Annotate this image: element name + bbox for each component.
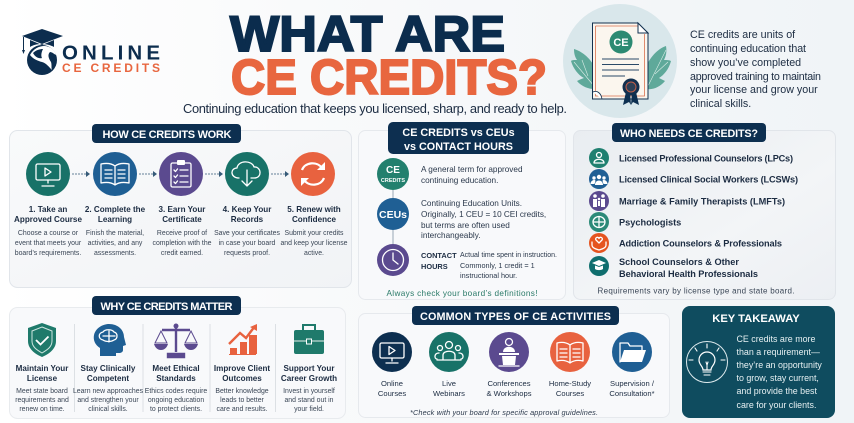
activity: online courses: Courses <box>378 389 406 398</box>
item: contact hours: HOURS <box>421 262 448 271</box>
logo: Online CE Credits: CE CREDITS <box>62 61 160 75</box>
takeaway text: to grow, stay current, <box>736 373 819 383</box>
item: CE credits: continuing education. <box>421 176 498 185</box>
heading: how CE credits work <box>92 124 241 143</box>
item: CE credits <box>377 158 523 190</box>
reason: ethical standards <box>145 324 207 413</box>
item: contact hours: instructional hour. <box>460 271 517 280</box>
step 4 <box>214 152 280 257</box>
panel: how CE credits work <box>10 124 352 288</box>
step 5: Submit your credits <box>285 230 344 237</box>
item: CEUs: interchangeably. <box>421 231 480 240</box>
arrow <box>205 171 223 177</box>
panel: key takeaway <box>682 306 835 418</box>
item: CE credits: CREDITS <box>381 178 405 184</box>
reason: career growth: your field. <box>294 406 324 413</box>
step 3 <box>153 152 212 257</box>
list item: LCSWs <box>589 169 798 189</box>
intro text: your license and grow your <box>690 84 818 96</box>
step 1: event that meets your <box>15 240 82 247</box>
step 4: requests proof. <box>224 250 270 257</box>
step 5: active. <box>304 250 324 257</box>
reason: maintain license: Meet state board <box>16 388 68 395</box>
item: CEUs <box>377 198 546 240</box>
item: contact hours: CONTACT <box>421 251 457 260</box>
activity: online courses: Online <box>381 379 403 388</box>
activity: live webinars: Webinars <box>433 389 465 398</box>
intro text: CE credits are units of <box>690 29 795 41</box>
step 1: Approved Course <box>14 215 82 224</box>
reason: career growth: Career Growth <box>281 374 337 383</box>
reason: stay competent: clinical skills. <box>88 406 128 413</box>
reason: career growth: Invest in yourself <box>283 388 335 395</box>
intro text: show you’ve completed <box>690 57 801 69</box>
step 4: Records <box>231 215 264 224</box>
step 5: Confidence <box>292 215 337 224</box>
list item: school counselors: School Counselors & Other <box>619 257 739 267</box>
icon: light bulb <box>686 342 728 382</box>
reason: career growth: and stand out in <box>284 397 334 404</box>
intro text <box>690 29 821 110</box>
reason: stay competent: Learn new approaches <box>73 388 144 395</box>
heading: why CE credits matter: WHY CE CREDITS MATTER <box>100 301 233 313</box>
reason: client outcomes: Better knowledge <box>215 388 269 395</box>
step 5: 5. Renew with <box>287 205 341 214</box>
reason: client outcomes: care and results. <box>217 406 268 413</box>
arrow <box>72 171 90 177</box>
reason: stay competent: Competent <box>87 374 129 383</box>
activity: live webinars <box>429 332 469 398</box>
step 2 <box>85 152 146 257</box>
list item: school counselors <box>589 256 758 279</box>
step 3: 3. Earn Your <box>159 205 206 214</box>
step 3: Certificate <box>162 215 202 224</box>
intro text: clinical skills. <box>690 98 751 110</box>
reason: career growth <box>281 325 337 413</box>
subtitle: Continuing education that keeps you licensed, sharp, and ready to help. <box>183 101 567 116</box>
heading: comparison <box>388 122 529 154</box>
reason: stay competent: and strengthen your <box>77 397 139 404</box>
title: CE CREDITS? <box>231 51 547 105</box>
reason: ethical standards: ongoing education <box>148 397 204 404</box>
reason: ethical standards: Ethics codes require <box>145 388 207 395</box>
reason: client outcomes: Improve Client <box>214 364 270 373</box>
step 1 <box>14 152 82 257</box>
intro text: approved training to maintain <box>690 71 821 83</box>
step 1: Choose a course or <box>18 230 79 237</box>
takeaway text <box>736 334 822 410</box>
item: CEUs: Continuing Education Units. <box>421 199 522 208</box>
item: CE credits: CE <box>386 165 400 176</box>
activity: supervision and consultation: Supervision / <box>610 379 655 388</box>
heading: common types <box>412 306 619 325</box>
reason: maintain license <box>15 323 69 413</box>
note: approval guidelines: *Check with your board for specific approval guidelines. <box>410 408 598 417</box>
step 2: Finish the material, <box>86 230 144 237</box>
heading: key takeaway: KEY TAKEAWAY <box>712 313 800 325</box>
step 2: activities, and any <box>88 240 143 247</box>
step 3: credit earned. <box>161 250 203 257</box>
activity: supervision and consultation <box>609 332 655 398</box>
step 3: completion with the <box>153 240 212 247</box>
activity: online courses <box>372 332 412 398</box>
list item: psychologists: Psychologists <box>619 218 681 228</box>
step 2: 2. Complete the <box>85 205 146 214</box>
panel: who needs CE credits <box>574 123 836 300</box>
list item: LMFTs: Marriage & Family Therapists (LMFTs) <box>619 196 785 206</box>
item: contact hours: Commonly, 1 credit = 1 <box>460 261 535 270</box>
note: requirements vary: Requirements vary by license type and state board. <box>598 286 794 296</box>
reason: maintain license: renew on time. <box>19 406 65 413</box>
item: CEUs: CEUs <box>379 209 407 221</box>
activity: conferences and workshops: & Workshops <box>486 389 532 398</box>
step 4: in case your board <box>219 240 276 247</box>
logo: Online CE Credits <box>22 29 160 75</box>
activity: supervision and consultation: Consultation* <box>609 389 655 398</box>
list item: LCSWs: Licensed Clinical Social Workers (LCSWs) <box>619 174 798 184</box>
list item: addiction counselors <box>589 233 782 253</box>
item: CEUs: Originally, 1 CEU = 10 CEI credits, <box>421 210 546 219</box>
step 1: board’s requirements. <box>15 250 81 257</box>
reason: maintain license: License <box>27 374 58 383</box>
list item: LPCs: Licensed Professional Counselors (LPCs) <box>619 154 793 164</box>
heading: comparison: vs CONTACT HOURS <box>404 141 513 153</box>
takeaway text: care for your clients. <box>736 400 816 410</box>
activity: home-study courses: Courses <box>556 389 584 398</box>
heading: why CE credits matter <box>92 296 241 315</box>
activity: home-study courses: Home-Study <box>549 379 591 388</box>
activity: home-study courses <box>549 332 591 398</box>
item: contact hours: Actual time spent in instruction. <box>460 252 557 259</box>
takeaway text: and provide the best <box>736 386 817 396</box>
step 5 <box>280 152 348 257</box>
list item: psychologists <box>589 212 681 232</box>
step 4: 4. Keep Your <box>223 205 272 214</box>
reason: ethical standards: Standards <box>156 374 196 383</box>
item: CE credits: A general term for approved <box>421 165 523 174</box>
list item: LPCs <box>589 148 793 168</box>
activity: conferences and workshops <box>486 332 532 398</box>
title <box>230 6 547 105</box>
list item: school counselors: Behavioral Health Professionals <box>619 269 758 279</box>
reason: client outcomes: leads to better <box>220 397 265 404</box>
item: CEUs: but terms are often used <box>421 221 510 230</box>
reason: client outcomes: Outcomes <box>222 374 262 383</box>
heading: comparison: CE CREDITS vs CEUs <box>402 127 515 139</box>
title: WHAT ARE <box>230 6 505 62</box>
reason: client outcomes <box>214 324 270 413</box>
heading: how CE credits work: HOW CE CREDITS WORK <box>102 129 232 141</box>
arrow <box>271 171 289 177</box>
note: check definitions: Always check your board’s definitions! <box>386 289 538 298</box>
takeaway text: than a requirement— <box>736 347 820 357</box>
takeaway text: they’re an opportunity <box>736 360 822 370</box>
activity: live webinars: Live <box>442 379 456 388</box>
step 4: Save your certificates <box>214 230 280 237</box>
reason: ethical standards: Meet Ethical <box>152 364 200 373</box>
panel: common types of CE activities <box>358 306 670 418</box>
panel: CE credits vs CEUs vs contact hours <box>358 122 566 300</box>
heading: who needs CE credits <box>612 123 766 142</box>
heading: common types: COMMON TYPES OF CE ACTIVITIES <box>420 311 611 323</box>
step 2: assessments. <box>94 250 136 257</box>
list item: LMFTs <box>589 191 785 211</box>
activity: conferences and workshops: Conferences <box>487 379 531 388</box>
reason: maintain license: requirements and <box>15 397 69 404</box>
step 2: Learning <box>98 215 132 224</box>
item: contact hours <box>377 244 557 280</box>
arrow <box>139 171 157 177</box>
intro text: continuing education that <box>690 43 806 55</box>
list item: addiction counselors: Addiction Counselors & Professionals <box>619 238 782 248</box>
step 5: and keep your license <box>280 240 348 247</box>
panel: why CE credits matter <box>10 296 346 418</box>
reason: stay competent: Stay Clinically <box>81 364 136 373</box>
step 3: Receive proof of <box>157 230 207 237</box>
reason: stay competent <box>73 324 144 413</box>
heading: who needs CE credits: WHO NEEDS CE CREDITS? <box>620 128 758 140</box>
reason: career growth: Support Your <box>284 364 335 373</box>
logo: Online CE Credits: ONLINE <box>62 42 160 64</box>
step 1: 1. Take an <box>29 205 67 214</box>
icon: certificate illustration <box>563 4 677 118</box>
takeaway text: CE credits are more <box>736 334 815 344</box>
icon: certificate illustration: CE <box>613 37 629 49</box>
reason: maintain license: Maintain Your <box>16 364 69 373</box>
reason: ethical standards: to protect clients. <box>150 406 202 413</box>
